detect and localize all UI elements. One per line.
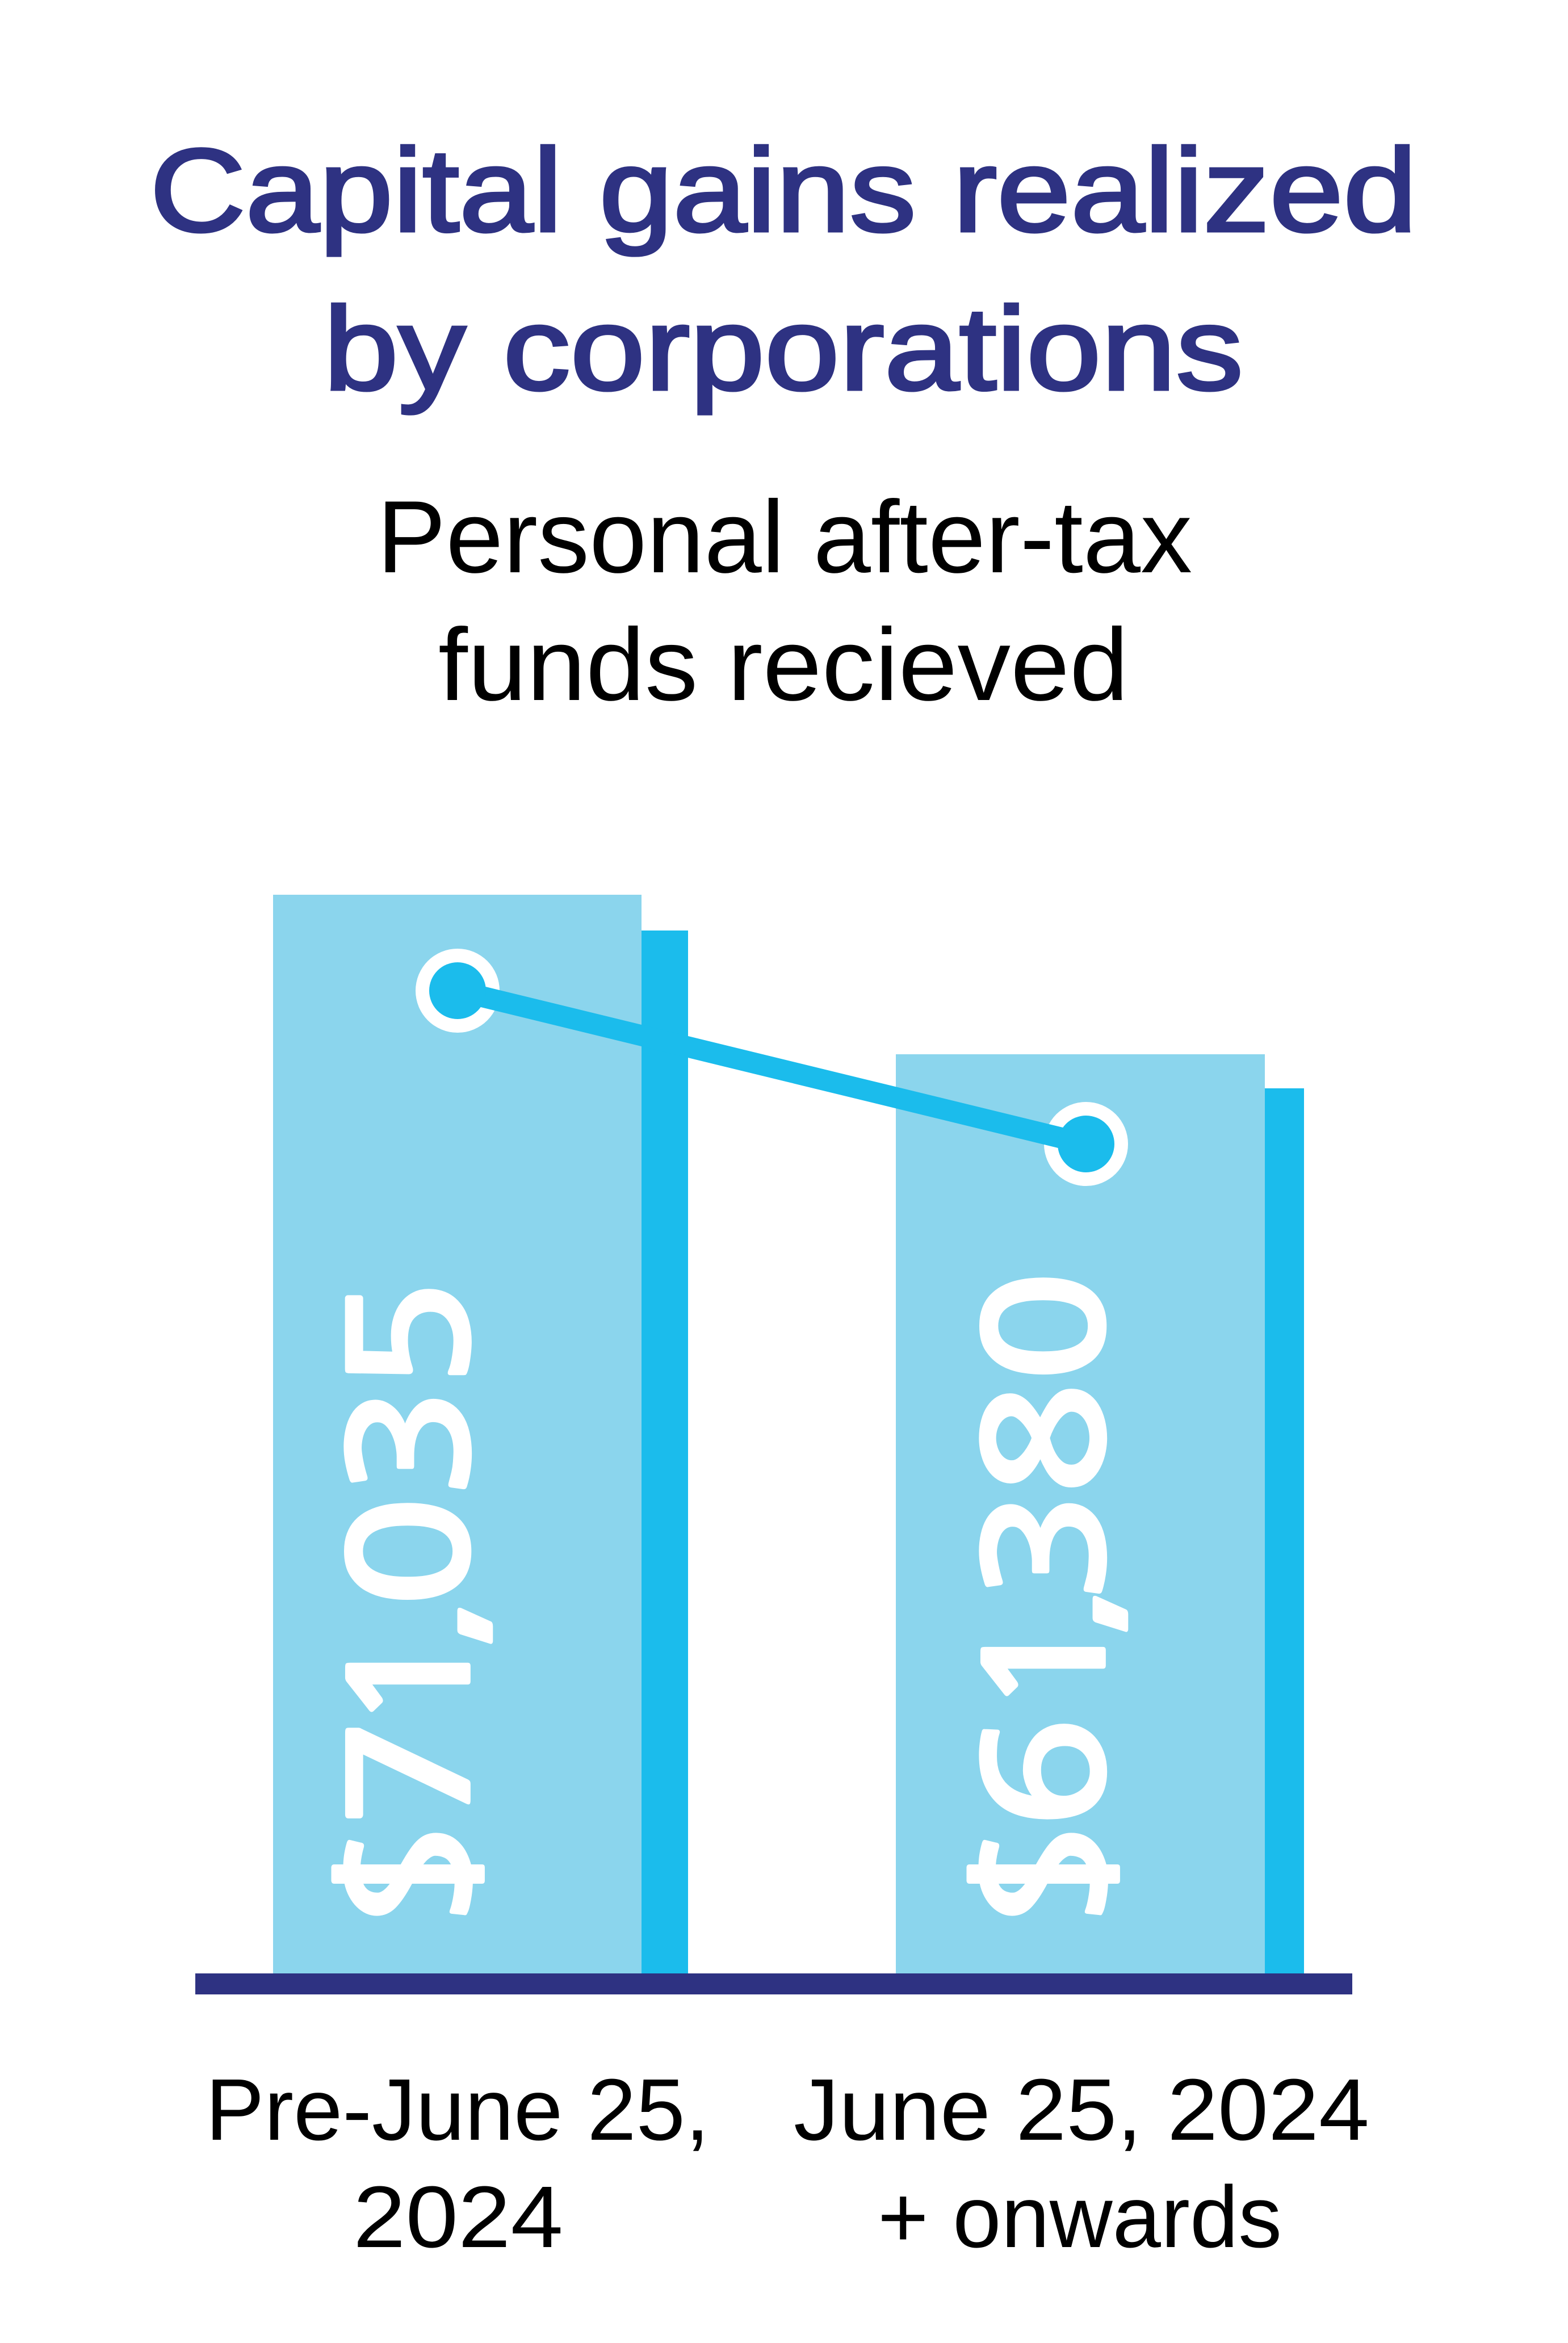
subtitle: funds recieved	[438, 607, 1129, 722]
value label: $71,035: $71,035	[332, 1277, 494, 1934]
title: Capital gains realized	[150, 125, 1417, 257]
bar chart	[195, 895, 1352, 1994]
trend line with markers	[416, 949, 1128, 1186]
subtitle: Personal after-tax	[377, 480, 1192, 594]
bar: pre-June 25, 2024	[273, 895, 688, 1975]
x-axis label: June 25, 2024 + onwards: + onwards	[878, 2168, 1282, 2266]
value label: $61,380: $61,380	[967, 1269, 1129, 1934]
bar: June 25, 2024 onwards	[896, 1054, 1304, 1975]
title: by corporations	[324, 283, 1243, 415]
axis baseline	[195, 1973, 1352, 1994]
x-axis label: June 25, 2024 + onwards: June 25, 2024	[794, 2061, 1369, 2158]
title	[150, 125, 1417, 415]
x-axis label: Pre-June 25, 2024	[206, 2061, 710, 2266]
x-axis label: Pre-June 25, 2024: Pre-June 25,	[206, 2061, 710, 2158]
x-axis label: June 25, 2024 + onwards	[794, 2061, 1369, 2266]
x-axis label: Pre-June 25, 2024: 2024	[353, 2168, 563, 2266]
subtitle	[377, 480, 1192, 722]
